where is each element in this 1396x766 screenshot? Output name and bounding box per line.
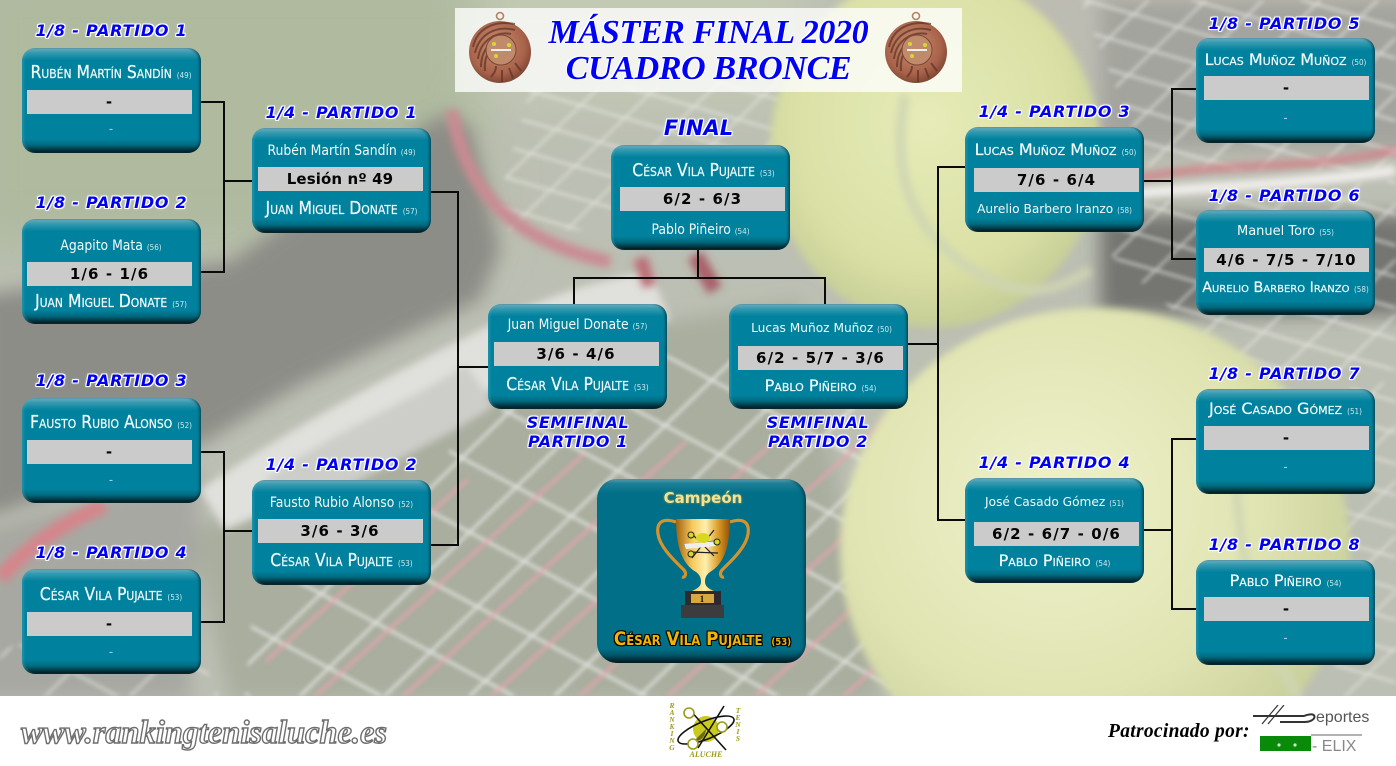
- score: [27, 90, 192, 114]
- score: -: [1283, 600, 1290, 618]
- heading: final: FINAL: [664, 116, 733, 140]
- player 1: Agapito Mata (56): [60, 238, 162, 254]
- panel: 1/8 partido 5: [1196, 38, 1375, 143]
- score: 3/6 - 4/6: [536, 345, 616, 363]
- title text: [547, 12, 869, 87]
- heading: semifinal partido 1: PARTIDO 1: [528, 432, 628, 450]
- score: 3/6 - 3/6: [300, 522, 380, 540]
- player 1: Lucas Muñoz Muñoz (50): [975, 140, 1136, 159]
- logo: ranking tenis aluche: A: [668, 708, 675, 717]
- player 1: César Vila Pujalte (53): [40, 585, 182, 605]
- score: 1/6 - 1/6: [70, 265, 149, 283]
- player 2: -: [1283, 460, 1288, 475]
- logo: ranking tenis aluche: G: [669, 743, 675, 752]
- score: 6/2 - 6/7 - 0/6: [992, 525, 1121, 543]
- logo: ranking tenis aluche: N: [668, 736, 675, 745]
- website address: www.rankingtenisaluche.es: [21, 715, 387, 751]
- heading: 1/4 partido 4: 1/4 - PARTIDO 4: [979, 453, 1130, 472]
- player 2: Pablo Piñeiro (54): [765, 376, 876, 395]
- heading: 1/8 partido 2: 1/8 - PARTIDO 2: [36, 193, 187, 212]
- lower field (net base): [0, 300, 880, 700]
- player 2: César Vila Pujalte (53): [270, 551, 413, 571]
- panel: 1/4 partido 3: [965, 126, 1144, 232]
- score: 6/2 - 6/3: [663, 190, 742, 208]
- score: [258, 167, 422, 191]
- logo: deportes felix: - ELIX: [1312, 738, 1357, 755]
- player 1: Fausto Rubio Alonso (52): [30, 413, 192, 433]
- heading: 1/8 partido 4: 1/8 - PARTIDO 4: [36, 543, 187, 562]
- player 1: Rubén Martín Sandín (49): [267, 143, 416, 159]
- player 2: -: [109, 473, 113, 488]
- icon: gold trophy: 1: [700, 594, 705, 604]
- player 1: José Casado Gómez (51): [1209, 399, 1362, 418]
- logo: ranking tenis aluche: R: [668, 701, 675, 710]
- panel: 1/8 partido 2: [22, 219, 200, 324]
- player 1: Manuel Toro (55): [1237, 224, 1334, 238]
- heading: 1/8 partido 7: 1/8 - PARTIDO 7: [1209, 364, 1360, 383]
- logo: ranking tenis aluche: K: [668, 722, 675, 731]
- heading: 1/4 partido 3: 1/4 - PARTIDO 3: [979, 102, 1130, 121]
- heading: 1/8 partido 5: 1/8 - PARTIDO 5: [1209, 14, 1360, 33]
- score: [974, 168, 1139, 192]
- player 2: Juan Miguel Donate (57): [35, 292, 187, 312]
- heading: 1/8 partido 3: 1/8 - PARTIDO 3: [36, 371, 187, 390]
- player 1: Rubén Martín Sandín (49): [30, 63, 192, 83]
- score: 6/2 - 5/7 - 3/6: [756, 349, 885, 367]
- champion name: César Vila Pujalte (53): [614, 629, 791, 650]
- icon: gold trophy: [656, 518, 750, 618]
- score: [258, 519, 422, 543]
- player 2: -: [109, 645, 113, 660]
- logo: ranking tenis aluche: N: [734, 720, 741, 729]
- player 2: Pablo Piñeiro (54): [999, 551, 1110, 570]
- player 2: Aurelio Barbero Iranzo (58): [1202, 280, 1369, 296]
- tennis ball top: [770, 0, 1100, 328]
- heading: semifinal partido 2: PARTIDO 2: [768, 432, 868, 450]
- score: 4/6 - 7/5 - 7/10: [1216, 251, 1357, 269]
- heading: semifinal partido 2: [766, 412, 869, 450]
- player 1: José Casado Gómez (51): [985, 495, 1124, 509]
- heading: semifinal partido 2: SEMIFINAL: [767, 412, 869, 432]
- tennis ball bottom: [840, 308, 1350, 766]
- player 2: Pablo Piñeiro (54): [651, 222, 750, 238]
- score: -: [106, 615, 113, 633]
- score: -: [1283, 429, 1290, 447]
- title text: CUADRO BRONCE: [566, 50, 851, 87]
- panel: 1/8 partido 8: [1196, 560, 1375, 664]
- score: [620, 187, 785, 211]
- panel: 1/4 partido 1: [252, 128, 431, 233]
- score: [27, 262, 192, 286]
- player 1: Fausto Rubio Alonso (52): [270, 494, 413, 510]
- sponsor label: Patrocinado por:: [1108, 721, 1250, 742]
- logo: ranking tenis aluche: I: [736, 727, 741, 736]
- title text: MÁSTER FINAL 2020: [549, 14, 868, 51]
- panel: semifinal 2: [729, 304, 908, 408]
- footer strip: [0, 696, 1396, 766]
- score: [1204, 248, 1369, 272]
- player 1: Juan Miguel Donate (57): [508, 316, 647, 332]
- player 1: Pablo Piñeiro (54): [1230, 571, 1341, 590]
- panel: 1/8 partido 6: [1196, 210, 1375, 314]
- logo: ranking tenis aluche: ALUCHE: [689, 750, 722, 759]
- player 2: -: [1283, 111, 1288, 126]
- heading: 1/4 partido 1: 1/4 - PARTIDO 1: [266, 103, 417, 122]
- score: [1204, 426, 1369, 450]
- racket frame: [200, 270, 670, 530]
- panel: 1/8 partido 3: [22, 398, 200, 502]
- title banner: [455, 8, 962, 92]
- score: -: [1283, 79, 1290, 97]
- heading: 1/8 partido 1: 1/8 - PARTIDO 1: [36, 21, 187, 40]
- panel: champion: [597, 479, 806, 663]
- score: [1204, 597, 1369, 621]
- grass top-left: [0, 0, 1396, 250]
- panel: 1/8 partido 4: [22, 569, 200, 674]
- logo: deportes felix: [1253, 705, 1369, 755]
- player 1: César Vila Pujalte (53): [632, 160, 775, 180]
- score: [974, 522, 1139, 546]
- panel: final: [611, 144, 790, 250]
- score: [27, 612, 192, 636]
- score: [27, 440, 192, 464]
- logo: ranking tenis aluche: T: [736, 706, 741, 715]
- score: [494, 342, 658, 366]
- champion label: Campeón: [664, 489, 742, 507]
- panel: 1/4 partido 4: [965, 478, 1144, 583]
- player 2: -: [1283, 631, 1288, 646]
- panel: 1/8 partido 1: [22, 48, 200, 152]
- icon: bronze medal right: [885, 12, 947, 83]
- player 1: Lucas Muñoz Muñoz (50): [751, 320, 892, 334]
- racket red stripes: [0, 110, 1396, 578]
- logo: deportes felix: eportes: [1316, 709, 1369, 726]
- player 1: Lucas Muñoz Muñoz (50): [1205, 50, 1366, 68]
- heading: 1/4 partido 2: 1/4 - PARTIDO 2: [266, 455, 417, 474]
- score: -: [106, 93, 113, 111]
- player 2: Juan Miguel Donate (57): [266, 199, 417, 219]
- score: -: [106, 443, 113, 461]
- player 2: Aurelio Barbero Iranzo (58): [977, 202, 1132, 216]
- logo: ranking tenis aluche: S: [736, 734, 740, 743]
- logo: ranking tenis aluche: N: [668, 715, 675, 724]
- icon: bronze medal left: [469, 12, 531, 83]
- score: 7/6 - 6/4: [1017, 171, 1096, 189]
- heading: 1/8 partido 8: 1/8 - PARTIDO 8: [1209, 535, 1360, 554]
- logo: ranking tenis aluche: [668, 701, 741, 759]
- panel: 1/4 partido 2: [252, 480, 431, 585]
- score: [738, 346, 903, 370]
- player 2: César Vila Pujalte (53): [506, 374, 649, 394]
- score: [1204, 76, 1369, 100]
- panel: 1/8 partido 7: [1196, 388, 1375, 494]
- panel: semifinal 1: [488, 304, 667, 408]
- dark court band: [0, 0, 1396, 520]
- heading: 1/8 partido 6: 1/8 - PARTIDO 6: [1209, 186, 1360, 205]
- logo: ranking tenis aluche: I: [670, 729, 675, 738]
- heading: semifinal partido 1: [526, 412, 629, 450]
- score: Lesión nº 49: [287, 170, 393, 188]
- heading: semifinal partido 1: SEMIFINAL: [527, 412, 629, 432]
- logo: ranking tenis aluche: E: [734, 713, 741, 722]
- player 2: -: [109, 122, 113, 137]
